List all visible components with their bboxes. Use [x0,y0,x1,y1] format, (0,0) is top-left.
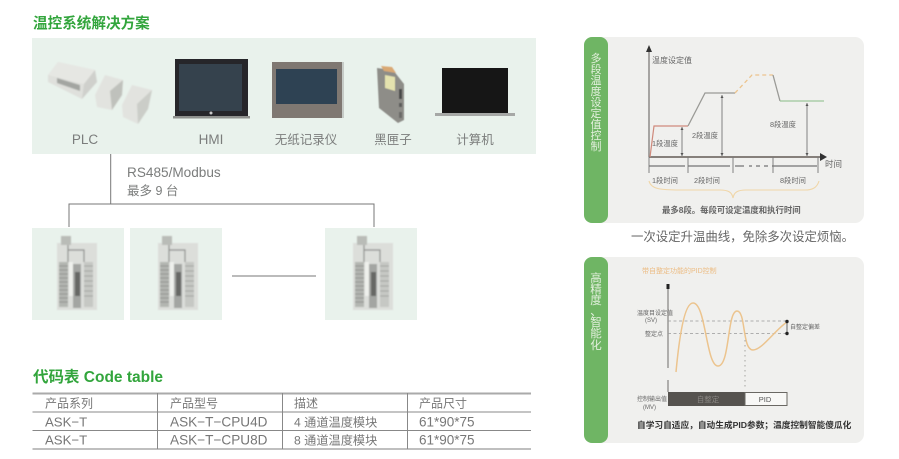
temperature module 1 [32,228,124,320]
device labels: 计算机 [456,132,494,147]
vertical label: 、 [590,306,602,318]
step temperature chart [646,45,842,215]
PID chart: 整定点 [645,330,663,338]
step temperature chart: 1段时间 [652,176,678,185]
vertical label: 能 [590,326,602,340]
vertical label: 设 [590,96,602,109]
caption: self-learning: 自学习自适应，自动生成PID参数；温度控制智能傻瓜化 [637,419,852,430]
PID chart: 带自整定功能的PID控制 [642,266,717,275]
panel: high precision and intelligence [584,257,864,443]
continuation line [232,275,316,277]
PID chart: PID [759,395,772,404]
step temperature chart: 2段时间 [694,176,720,185]
step temperature chart: 温度设定值 [652,55,692,65]
code table: 61*90*75 [419,414,475,430]
vertical label: 定 [590,106,602,120]
vertical label: 智 [590,315,602,329]
device labels: PLC [72,132,98,147]
icon: black box [377,66,404,123]
panel: multi-segment setpoint control [584,37,864,223]
PID chart: 自整定偏差 [790,323,820,331]
step temperature chart: 8段温度 [770,120,797,129]
PID chart: 控制输出值 [637,395,667,403]
code table: 产品尺寸 [419,396,467,410]
icon: laptop [435,68,515,116]
device labels: 黑匣子 [374,133,412,147]
vertical label: 温 [590,74,602,87]
heading: code table: 代码表 Code table [33,368,163,386]
PID chart: 温度目设定值 [637,309,673,317]
code table: 4 通道温度模块 [294,414,377,430]
panel: connected devices [32,38,536,154]
icon: PLC [48,62,152,124]
vertical label: 多 [590,51,602,65]
vertical label: 度 [590,293,602,307]
device labels: 无纸记录仪 [275,133,338,147]
code table: ASK−T [45,414,87,430]
vertical label: 制 [590,140,602,153]
step temperature chart: 2段温度 [692,131,719,140]
temperature module 3 [325,228,417,320]
PID chart: (MV) [643,405,656,411]
vertical label [590,51,602,153]
communication label: 最多 9 台 [127,183,178,198]
step temperature chart: 8段时间 [780,176,806,185]
vertical label: 精 [590,283,602,296]
code table: 产品型号 [170,396,218,410]
icon: paperless recorder [272,62,344,118]
PID chart: 自整定 [697,394,720,404]
communication label: RS485/Modbus [127,165,221,180]
vertical label: 化 [590,338,602,352]
caption: multi-segment: 一次设定升温曲线，免除多次设定烦恼。 [631,229,854,244]
code table: 产品系列 [45,396,93,410]
code table: 描述 [294,396,318,410]
code table: 8 通道温度模块 [294,432,377,448]
vertical label: 控 [590,128,602,142]
vertical label: 值 [590,118,602,131]
title: temperature control solution: 温控系统解决方案 [33,14,150,32]
code table: ASK−T−CPU8D [170,432,268,448]
vertical label: 度 [590,84,602,98]
code table [32,393,531,449]
step temperature chart: 1段温度 [652,139,679,148]
PID chart [637,266,820,411]
vertical label: 高 [590,271,602,285]
code table: ASK−T−CPU4D [170,414,268,430]
PID chart: (SV) [645,318,657,324]
bus connector lines [69,154,374,227]
communication label [127,165,221,198]
step temperature chart: 最多8段。每段可设定温度和执行时间 [662,205,801,215]
code table: ASK−T [45,432,87,448]
vertical label: 段 [590,62,602,76]
temperature module 2 [130,228,222,320]
step temperature chart: 时间 [825,159,842,169]
vertical label [590,271,602,352]
device labels [72,132,494,147]
icon: HMI [173,59,250,118]
code table: 61*90*75 [419,432,475,448]
device labels: HMI [199,132,223,147]
